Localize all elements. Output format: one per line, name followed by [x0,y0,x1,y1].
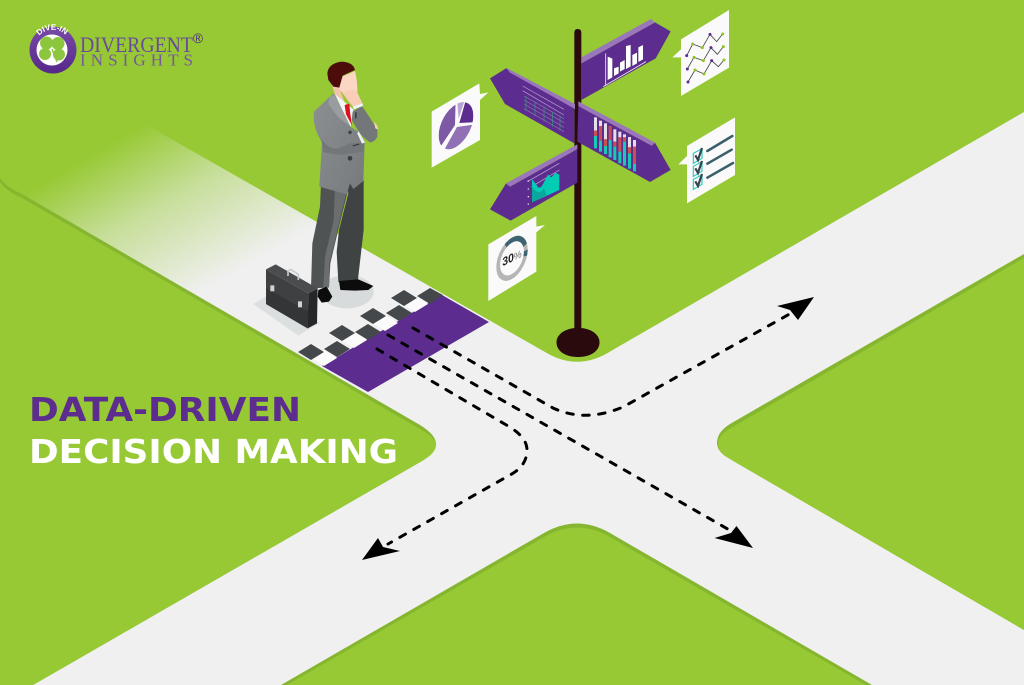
dashed route: lower left [377,349,527,544]
green block: right [717,254,1024,630]
logo [30,24,203,74]
purple start band [322,295,489,392]
shirt cuff [353,103,363,109]
title: line one: DATA-DRIVEN [29,390,301,429]
signpost base [556,328,600,357]
card: pie chart [430,83,488,168]
logo badge [30,24,76,74]
businessman with briefcase [253,62,378,336]
face [337,71,357,100]
man's left shoe [318,287,332,303]
raised sleeve [352,106,377,142]
shirt strip [357,131,365,144]
arrow head: upper right [777,297,814,320]
jacket buttons [348,112,359,161]
sign: upper left, data table [490,68,575,143]
man's right leg [337,180,364,282]
shirt [335,94,353,127]
tie [345,104,352,126]
trouser highlight [323,187,348,288]
neck [332,84,345,103]
hair [327,62,355,88]
logo tagline: INSIGHTS [80,50,193,70]
sign: upper right, bar chart [581,19,671,100]
sign: lower left, area chart [490,144,577,221]
signpost cluster [430,10,735,337]
upper body [314,62,378,194]
jacket [314,93,365,194]
title: line two: DECISION MAKING [29,432,398,471]
man's right shoe [339,279,373,291]
logo badge: DIVE-IN [36,24,68,36]
arrow head: lower left [362,538,400,560]
dashed route: straight on [388,335,733,532]
other hand [374,122,378,130]
briefcase shadow [253,295,320,336]
dashed route: upper right [413,311,795,415]
registered mark: ® [193,31,203,46]
card: line chart [672,10,729,96]
card: checklist [678,117,735,203]
man's floor shadow [320,275,374,308]
jacket lapel [328,94,351,127]
signpost pole [574,29,581,337]
checkered start line [298,288,443,366]
arrow head: lower right [714,526,753,548]
lower body and briefcase [253,180,374,336]
sign: lower right, stacked bars [577,101,671,182]
hand on chin [343,90,363,108]
briefcase [266,264,318,328]
man's left leg [311,183,349,289]
green block: left [0,178,436,685]
card: 30 percent gauge [488,216,545,301]
logo wordmark: DIVERGENT [80,32,193,57]
jacket waist shading [321,138,364,155]
card: 30 percent gauge: 30% [502,246,522,269]
green block: bottom [281,524,872,685]
